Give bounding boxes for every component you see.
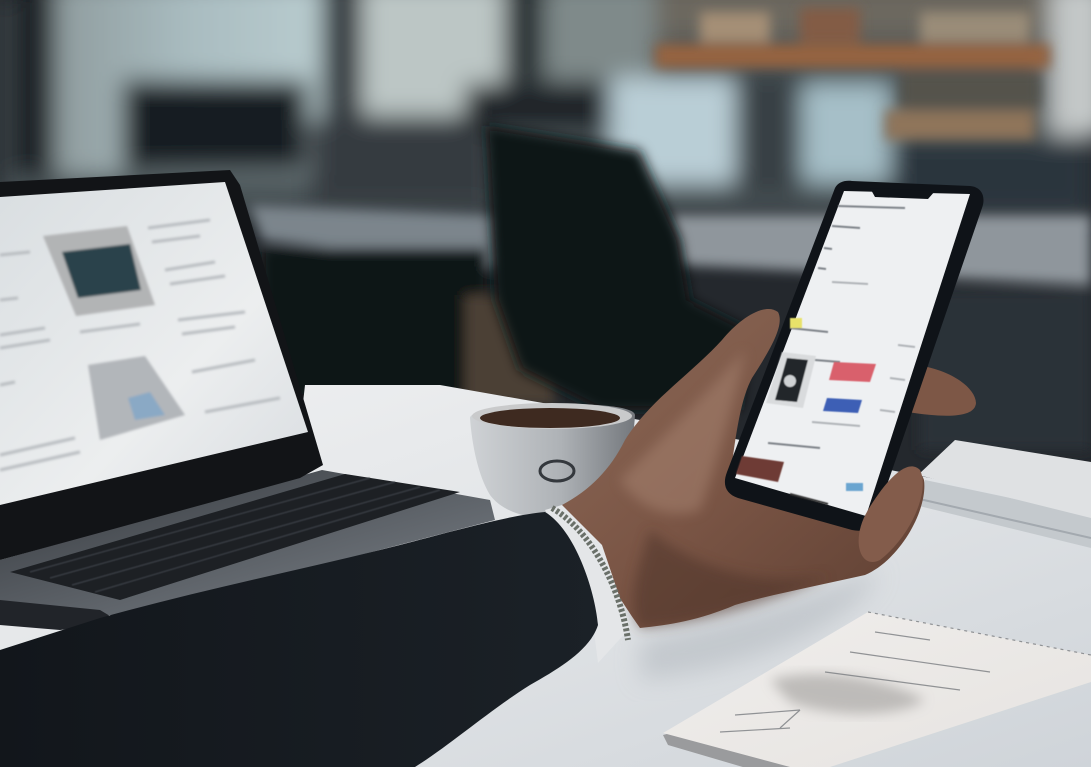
shirt cuff with bracelet — [545, 505, 630, 663]
white table — [0, 385, 1091, 767]
background shelf — [655, 8, 1050, 140]
laptop screen — [0, 182, 308, 505]
smartphone — [725, 181, 984, 531]
palm highlight — [620, 350, 745, 514]
stacked papers right — [915, 440, 1091, 548]
far fingertip behind phone — [908, 365, 976, 416]
dark sleeve — [0, 512, 598, 767]
phone red banner — [829, 362, 876, 382]
laptop base and keyboard — [0, 470, 495, 630]
phone screen — [735, 191, 970, 516]
laptop lid bezel — [0, 170, 323, 560]
phone notch — [870, 188, 935, 199]
notebook — [663, 612, 1091, 767]
fingers over phone edge — [859, 466, 923, 562]
laptop screen content — [0, 220, 280, 470]
phone product image — [766, 352, 816, 408]
palm shadow — [634, 530, 830, 628]
background chair — [485, 125, 750, 410]
hand — [562, 309, 976, 628]
phone thumbnail — [736, 456, 784, 482]
phone screen content — [736, 206, 915, 504]
phone blue button — [823, 398, 862, 413]
laptop — [0, 170, 495, 630]
palm and wrist — [562, 309, 924, 628]
background desks — [250, 205, 1091, 450]
phone body — [725, 181, 984, 531]
phone yellow highlight — [790, 318, 802, 328]
coffee cup — [470, 403, 635, 518]
